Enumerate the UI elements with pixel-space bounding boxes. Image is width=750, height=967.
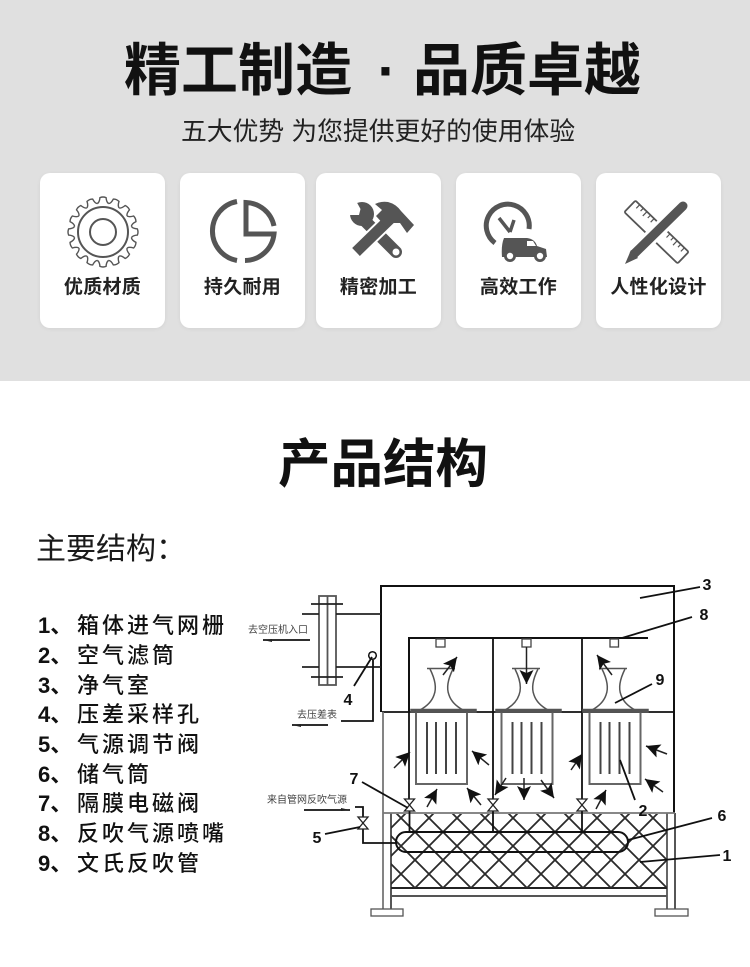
- callout numbers: 2: [639, 803, 648, 820]
- parts list: 9、: [38, 851, 72, 876]
- label: efficient: 高效工作: [480, 276, 557, 298]
- card: user-friendly: [596, 173, 721, 328]
- callout numbers: 4: [344, 692, 353, 709]
- heading: main structure: 主要结构：: [36, 532, 186, 566]
- callout numbers: 5: [313, 830, 322, 847]
- parts list: 6、: [38, 762, 72, 787]
- parts list: 储气筒: [77, 762, 152, 787]
- label: precision: 精密加工: [340, 276, 417, 298]
- icon: gear: [67, 196, 139, 268]
- pressure sampling port: [341, 652, 376, 721]
- venturi tubes: [411, 668, 648, 712]
- parts list: [38, 613, 227, 876]
- pipe labels: 去空压机入口: [248, 623, 308, 636]
- parts list: 空气滤筒: [77, 643, 177, 668]
- callout numbers: 7: [350, 771, 359, 788]
- parts list: 压差采样孔: [77, 702, 202, 727]
- parts list: 净气室: [77, 673, 152, 698]
- label: quality material: 优质材质: [64, 276, 141, 298]
- pipe labels: [248, 623, 347, 806]
- label: durable: 持久耐用: [204, 276, 281, 298]
- title: 精工制造: [124, 39, 352, 103]
- pipe labels: 来自管网反吹气源: [267, 793, 347, 806]
- parts list: 气源调节阀: [77, 732, 202, 757]
- icon: pie chart: [210, 199, 277, 263]
- parts list: 8、: [38, 821, 72, 846]
- callout lines: [325, 587, 720, 862]
- parts list: 4、: [38, 702, 72, 727]
- callout numbers: [313, 577, 732, 865]
- card: durable: [180, 173, 305, 328]
- icon: ruler and pencil: [624, 200, 689, 264]
- parts list: 2、: [38, 643, 72, 668]
- regulating valve and feed pipe: [355, 807, 396, 843]
- pipe labels: 去压差表: [297, 708, 337, 721]
- icon: wrench and hammer: [350, 202, 414, 258]
- title: [124, 39, 641, 103]
- title: 品质卓越: [413, 39, 641, 103]
- diaphragm valves and pipes: [404, 799, 587, 832]
- header background panel: [0, 0, 750, 381]
- icon: clock and van: [484, 202, 547, 262]
- pipe arrows: [263, 640, 350, 810]
- diagram housing frame: [371, 586, 688, 916]
- callout numbers: 6: [718, 808, 727, 825]
- inlet grille mesh: [391, 814, 667, 888]
- card: quality material: [40, 173, 165, 328]
- filter cartridges: [416, 712, 640, 784]
- label: user-friendly: 人性化设计: [610, 276, 707, 298]
- callout numbers: 1: [723, 848, 732, 865]
- parts list: 文氏反吹管: [77, 851, 202, 876]
- callout numbers: 9: [656, 672, 665, 689]
- card: precision: [316, 173, 441, 328]
- parts list: 3、: [38, 673, 72, 698]
- heading: product structure: 产品结构: [278, 435, 488, 494]
- parts list: 7、: [38, 791, 72, 816]
- callout numbers: 3: [703, 577, 712, 594]
- parts list: 反吹气源喷嘴: [77, 821, 227, 846]
- flange and compressor pipes: [302, 596, 381, 685]
- card: efficient: [456, 173, 581, 328]
- airflow arrows: [394, 647, 667, 809]
- air storage cylinder: [396, 832, 628, 852]
- subtitle: 五大优势 为您提供更好的使用体验: [181, 118, 575, 146]
- blow nozzles: [436, 639, 618, 647]
- title: ·: [378, 39, 396, 103]
- parts list: 隔膜电磁阀: [77, 791, 202, 816]
- parts list: 1、: [38, 613, 72, 638]
- callout numbers: 8: [700, 607, 709, 624]
- parts list: 箱体进气网栅: [77, 613, 227, 638]
- parts list: 5、: [38, 732, 72, 757]
